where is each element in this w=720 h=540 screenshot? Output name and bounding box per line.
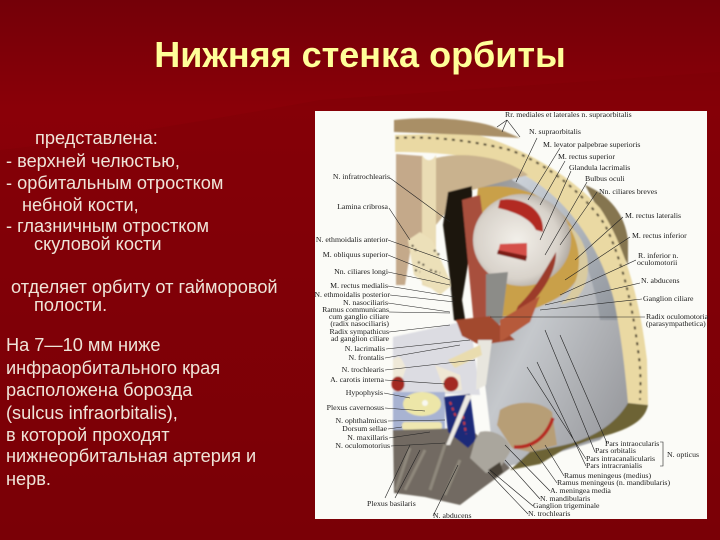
lateral muscle — [512, 252, 556, 320]
text block: description of the lower orbital wall: небной кости, — [22, 195, 139, 215]
left-side labels: M. obliquus superior — [323, 250, 388, 259]
medial rectus muscle — [462, 195, 494, 330]
left-side labels: cum ganglio ciliare — [329, 312, 390, 321]
left-side labels: Radix sympathicus — [329, 327, 389, 336]
bottom labels: N. opticus — [667, 450, 699, 459]
text block: description of the lower orbital wall: - глазничным отростком — [6, 216, 209, 236]
right-side labels: Ganglion ciliare — [643, 294, 694, 303]
right-side labels: R. inferior n. — [638, 251, 678, 260]
hypophysis — [403, 392, 441, 416]
left-side labels: N. nasociliaris — [343, 298, 388, 307]
text block: description of the lower orbital wall: - орбитальным отростком — [6, 173, 223, 193]
text block: description of the lower orbital wall: нижнеорбитальная артерия и — [6, 446, 256, 466]
bone band — [395, 133, 648, 405]
skull section drawing — [392, 118, 648, 505]
leader lines — [384, 120, 663, 516]
right-side labels: M. rectus lateralis — [625, 211, 681, 220]
meningeal artery — [514, 418, 553, 447]
bottom labels: Pars intraocularis — [605, 439, 659, 448]
dorsum sellae — [402, 422, 442, 430]
left-side labels: N. maxillaris — [347, 433, 388, 442]
right-side labels: oculomotorii — [637, 258, 678, 267]
left-side labels: N. frontalis — [348, 353, 384, 362]
lower dark fossa — [393, 428, 510, 505]
text block: description of the lower orbital wall: На 7—10 мм ниже — [6, 335, 160, 355]
right-side labels: Bulbus oculi — [585, 174, 625, 183]
text block: description of the lower orbital wall: (sulcus infraorbitalis), — [6, 403, 178, 423]
text block: description of the lower orbital wall: нерв. — [6, 469, 51, 489]
optic tract tube — [476, 340, 492, 390]
cavernous plexus — [444, 394, 476, 448]
left-side labels: (radix nasociliaris) — [330, 319, 389, 328]
trigeminal ganglion — [470, 431, 510, 473]
internal carotid arteries — [392, 376, 404, 392]
bottom labels: Pars intracanalicularis — [586, 454, 655, 463]
right-side labels: N. supraorbitalis — [529, 127, 581, 136]
lower muscle fan — [498, 243, 527, 258]
left-side labels: Lamina cribrosa — [337, 202, 389, 211]
left-side labels: Ramus communicans — [322, 305, 389, 314]
bottom labels — [367, 439, 699, 520]
orbital fat rim — [470, 186, 582, 320]
bottom labels: N. abducens — [433, 511, 472, 520]
right-side labels: M. levator palpebrae superioris — [543, 140, 640, 149]
right-side labels: Glandula lacrimalis — [569, 163, 630, 172]
title: Нижняя стенка орбиты — [154, 34, 566, 75]
left-side labels: N. ethmoidalis posterior — [314, 290, 390, 299]
text block: description of the lower orbital wall: скуловой кости — [34, 234, 162, 254]
text block: description of the lower orbital wall: - верхней челюстью, — [6, 151, 180, 171]
bottom labels: Ramus meningeus (n. mandibularis) — [557, 478, 670, 487]
bone base — [510, 403, 648, 470]
brow ridge — [585, 185, 628, 265]
bottom labels: Pars orbitalis — [595, 446, 636, 455]
optic nerve — [486, 272, 508, 330]
right-side labels: M. rectus superior — [558, 152, 615, 161]
right-side labels: Nn. ciliares breves — [599, 187, 657, 196]
frontal sinus wall — [396, 154, 430, 285]
left-side labels: Nn. ciliares longi — [334, 267, 389, 276]
left-side labels: A. carotis interna — [330, 375, 385, 384]
left-side labels — [314, 172, 390, 450]
left-side labels: N. ophthalmicus — [335, 416, 387, 425]
left-side labels: N. lacrimalis — [345, 344, 385, 353]
left-side labels: ad ganglion ciliare — [331, 334, 390, 343]
dura grey band — [480, 160, 630, 470]
left-side labels: Plexus cavernosus — [327, 403, 384, 412]
left-side labels: N. oculomotorius — [335, 441, 390, 450]
ethmoid cells — [408, 232, 452, 295]
bottom labels: A. meningea media — [550, 486, 611, 495]
left-side labels: N. trochlearis — [342, 365, 384, 374]
left nerve stumps — [393, 357, 406, 380]
right-side labels: Radix oculomotoria — [646, 312, 709, 321]
middle cranial fossa patch — [497, 403, 557, 452]
eyeball — [473, 194, 571, 286]
left-side labels: N. infratrochlearis — [333, 172, 390, 181]
text block: description of the lower orbital wall: отделяет орбиту от гайморовой — [11, 277, 278, 297]
text block: description of the lower orbital wall — [6, 128, 278, 489]
text block: description of the lower orbital wall: полости. — [34, 295, 107, 315]
bottom labels: N. trochlearis — [528, 509, 570, 518]
right-side labels: N. abducens — [641, 276, 680, 285]
dark orbital margin — [443, 186, 472, 325]
apex muscle bundle — [456, 316, 515, 345]
bottom labels: Pars intracranialis — [586, 461, 642, 470]
text block: description of the lower orbital wall: представлена: — [35, 128, 158, 148]
skull top strip — [394, 118, 520, 138]
bottom labels: Plexus basilaris — [367, 499, 416, 508]
right-side labels: (parasympathetica) — [646, 319, 706, 328]
bottom labels: Ramus meningeus (medius) — [564, 471, 651, 480]
bottom labels: N. mandibularis — [540, 494, 590, 503]
left-side labels: M. rectus medialis — [330, 281, 388, 290]
pale sella — [393, 392, 445, 430]
text block: description of the lower orbital wall: инфраорбитального края — [6, 358, 220, 378]
left-side labels: N. ethmoidalis anterior — [316, 235, 388, 244]
bottom labels: Ganglion trigeminale — [533, 501, 600, 510]
right-side labels — [505, 110, 709, 328]
text block: description of the lower orbital wall: расположена борозда — [6, 380, 192, 400]
superior rectus muscle — [498, 199, 543, 232]
right-side labels: Rr. mediales et laterales n. supraorbitalis — [505, 110, 632, 119]
left-side labels: Dorsum sellae — [342, 424, 388, 433]
left-side labels: Hypophysis — [346, 388, 383, 397]
text block: description of the lower orbital wall: в которой проходят — [6, 425, 170, 445]
right-side labels: M. rectus inferior — [632, 231, 687, 240]
